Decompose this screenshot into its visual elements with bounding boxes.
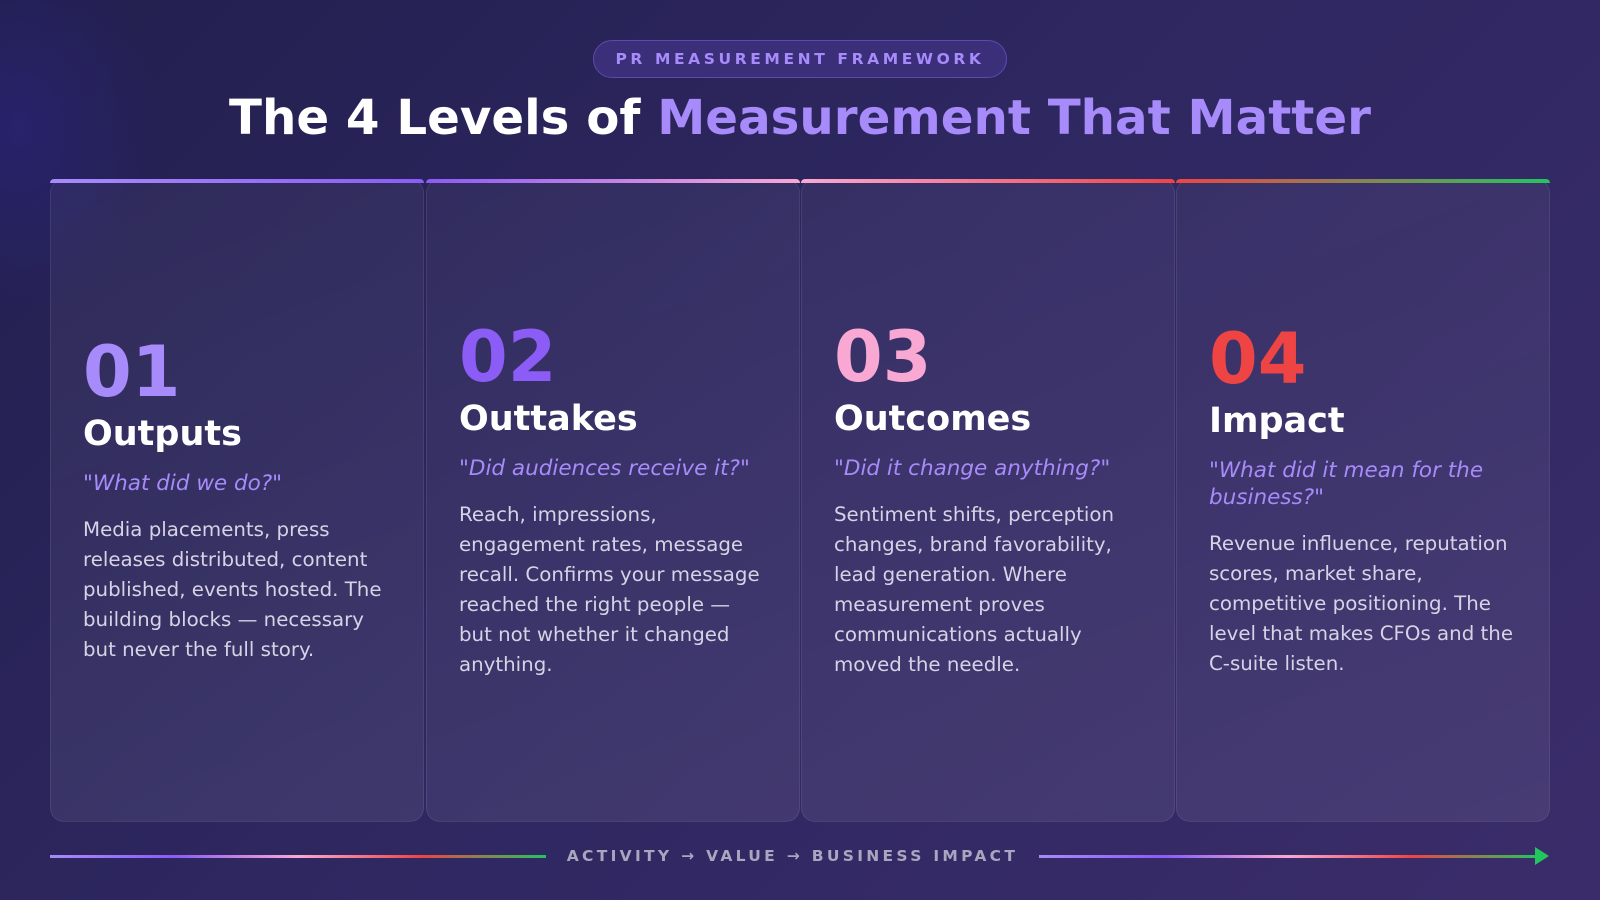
panel: outcomes [801,179,1175,822]
footer label: ACTIVITY → VALUE → BUSINESS IMPACT [567,847,1018,865]
number 04: 04 [1209,318,1306,400]
heading: impact: Impact [1209,400,1345,440]
question: "What did we do?" [83,471,282,496]
arrowhead [1535,847,1549,865]
tag pill [593,40,1007,78]
panel: impact [1176,179,1550,822]
description: Reach, impressions, engagement rates, message recall. Confirms your message reached the right people — but not whether it changed anything. [459,503,760,676]
heading: outtakes: Outtakes [459,399,638,439]
description: Media placements, press releases distributed, content published, events hosted. The building blocks — necessary but never the full story. [83,518,382,661]
description: Revenue influence, reputation scores, market share, competitive positioning. The level that makes CFOs and the C-suite listen. [1209,532,1513,674]
question: "Did audiences receive it?" [459,456,750,481]
number 01: 01 [83,331,180,413]
question: "Did it change anything?" [834,456,1110,481]
question: "What did it mean for the business?" [1209,458,1483,510]
panel: outputs [50,179,424,822]
title: The 4 Levels of Measurement That Matter [229,90,1371,146]
heading: outcomes: Outcomes [834,399,1031,439]
number 02: 02 [459,316,556,398]
footer progression arrow [50,847,1549,865]
tag pill: PR MEASUREMENT FRAMEWORK [615,50,985,68]
description: Sentiment shifts, perception changes, brand favorability, lead generation. Where measurement proves communications actually moved the needle. [834,503,1114,676]
panel: outtakes [426,179,800,822]
number 03: 03 [834,316,931,398]
heading: outputs: Outputs [83,414,242,454]
